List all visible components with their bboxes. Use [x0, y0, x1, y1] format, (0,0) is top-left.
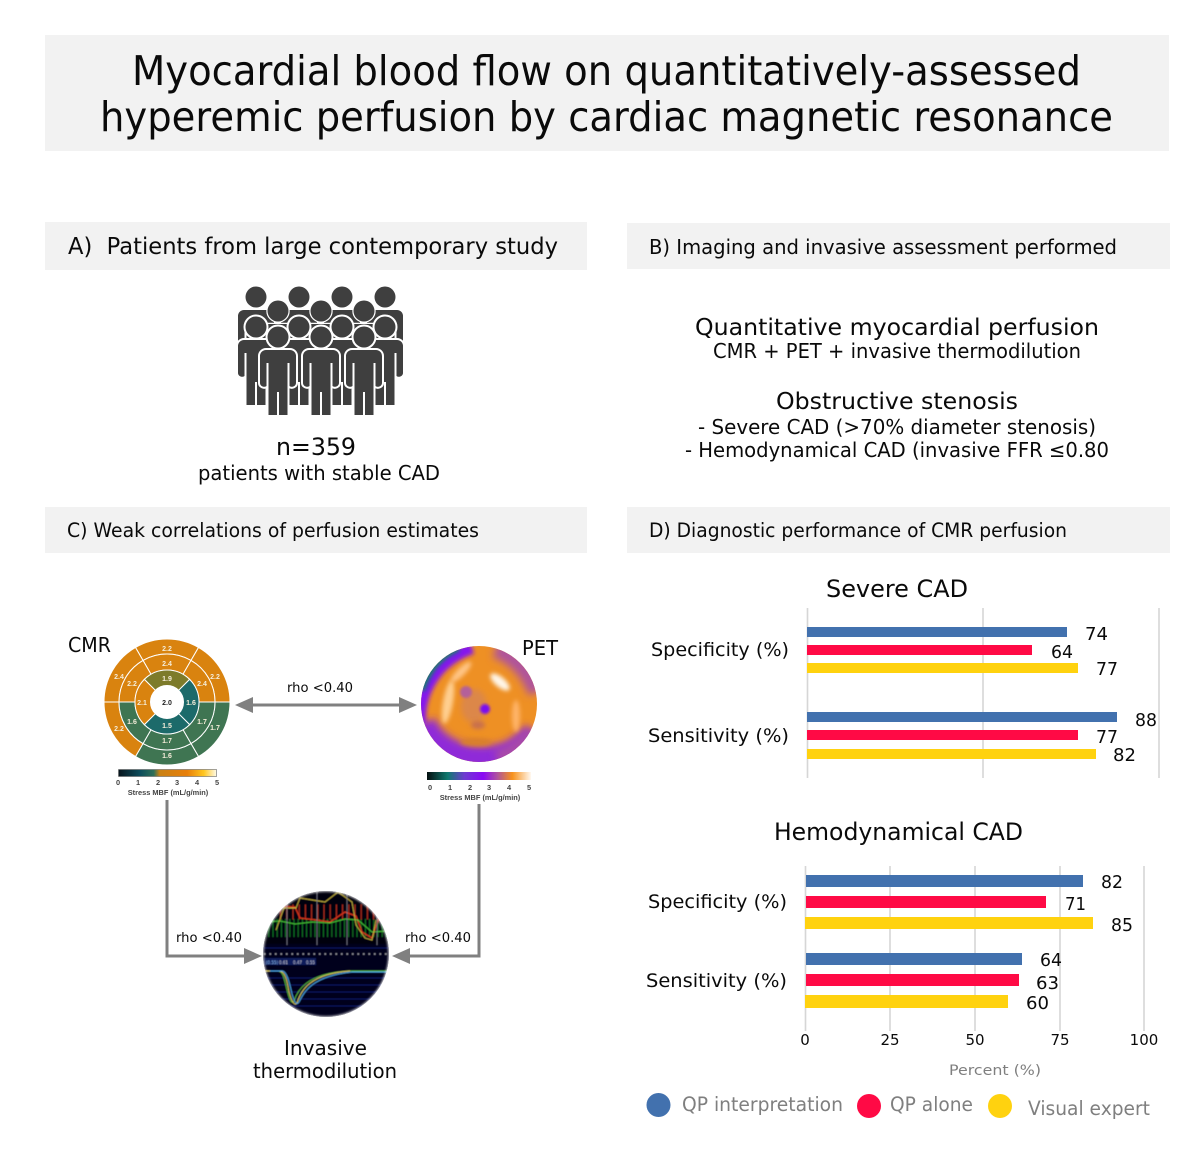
x axis labels: 50: [965, 1031, 985, 1049]
label: CMR PET correlation: rho <0.40: [287, 680, 353, 696]
patient description: patients with stable CAD: [198, 461, 440, 485]
x axis labels: [800, 1031, 1158, 1049]
chart: CMR bullseye: 2.2: [210, 674, 220, 681]
x axis labels: 0: [800, 1031, 810, 1049]
title banner: Myocardial blood flow on quantitatively-assessed: [132, 47, 1081, 95]
chart: CMR bullseye: 2.1: [137, 700, 147, 707]
caption: invasive thermodilution: thermodilution: [253, 1059, 397, 1083]
chart: hemodynamical CAD: 71: [1065, 894, 1086, 915]
image: invasive thermodilution trace: (0.55): [266, 960, 278, 965]
legend: CMR colour bar: 4: [195, 778, 200, 787]
chart: CMR bullseye: 1.6: [186, 700, 196, 707]
heading D: D) Diagnostic performance of CMR perfusion: [649, 519, 1067, 542]
arrow: PET to thermodilution: [392, 804, 479, 964]
text: quantitative perfusion: Quantitative myocardial perfusion: [695, 313, 1099, 341]
chart: CMR bullseye: 1.7: [162, 738, 172, 745]
legend: CMR colour bar: Stress MBF (mL/g/min): [128, 788, 209, 797]
chart: CMR bullseye: 2.2: [114, 726, 124, 733]
chart: hemodynamical CAD: 64: [1040, 950, 1062, 971]
legend: Visual expert: [988, 1094, 1150, 1120]
chart: CMR bullseye: 1.7: [210, 725, 220, 732]
heading A: A) Patients from large contemporary study: [68, 234, 558, 260]
chart: severe CAD: 64: [1051, 642, 1073, 663]
arrow: CMR to PET: [235, 697, 417, 713]
legend: QP interpretation: QP interpretation: [682, 1093, 843, 1116]
legend: PET colour bar: 1: [448, 783, 452, 792]
chart: severe CAD: 77: [1096, 659, 1118, 680]
x axis labels: 75: [1050, 1031, 1070, 1049]
legend: QP alone: QP alone: [890, 1093, 973, 1116]
chart: CMR bullseye: 1.9: [162, 676, 172, 683]
x axis title: Percent (%): [949, 1063, 1041, 1079]
PET label: PET: [522, 636, 559, 660]
chart: hemodynamical CAD: 82: [1101, 872, 1123, 893]
legend: PET colour bar: Stress MBF (mL/g/min): [440, 793, 521, 802]
chart: hemodynamical CAD: Specificity (%): [648, 891, 787, 913]
arrow: CMR to thermodilution: [167, 800, 262, 964]
heading B: [627, 223, 1170, 269]
panel C: correlations: [45, 507, 587, 1083]
image: invasive thermodilution trace: 0.47: [293, 960, 302, 965]
legend: CMR colour bar: 1: [136, 778, 140, 787]
x axis labels: 100: [1130, 1031, 1158, 1049]
legend: QP alone: [857, 1093, 973, 1118]
caption: invasive thermodilution: Invasive: [284, 1036, 367, 1060]
image: invasive thermodilution trace: 0.55: [306, 960, 315, 965]
text: quantitative perfusion: CMR + PET + invasive thermodilution: [713, 339, 1081, 363]
heading C: C) Weak correlations of perfusion estimates: [67, 519, 479, 542]
chart: severe CAD: Severe CAD: [826, 575, 968, 603]
panel B: assessment: [627, 223, 1170, 462]
panel A: patients: [45, 222, 587, 485]
title banner: [45, 35, 1169, 151]
chart: severe CAD: 82: [1113, 745, 1136, 766]
legend: CMR colour bar: 3: [175, 778, 179, 787]
chart: severe CAD: Sensitivity (%): [648, 725, 789, 747]
heading A: [45, 222, 587, 270]
image: invasive thermodilution trace: [260, 888, 392, 1020]
chart: CMR bullseye: 2.0: [162, 700, 172, 707]
legend: CMR colour bar: [116, 770, 219, 797]
chart: CMR bullseye: 1.6: [127, 719, 137, 726]
legend: CMR colour bar: 2: [156, 778, 160, 787]
image: invasive thermodilution trace: 0.61: [279, 960, 288, 965]
chart: PET polar map: [420, 645, 538, 763]
chart: CMR bullseye: 1.5: [162, 723, 172, 730]
label: CMR thermodilution correlation: rho <0.40: [176, 930, 242, 946]
icon: crowd of patients: [238, 286, 403, 415]
legend: PET colour bar: 0: [428, 783, 432, 792]
legend: PET colour bar: 3: [487, 783, 491, 792]
heading C: [45, 507, 587, 553]
legend: PET colour bar: 5: [527, 783, 531, 792]
text: obstructive stenosis: - Severe CAD (>70% diameter stenosis): [698, 415, 1096, 439]
chart: severe CAD: 88: [1135, 710, 1157, 731]
legend: CMR colour bar: 0: [116, 778, 120, 787]
chart: CMR bullseye: 2.2: [127, 681, 137, 688]
text: quantitative perfusion: [695, 313, 1099, 363]
text: obstructive stenosis: - Hemodynamical CAD (invasive FFR ≤0.80: [685, 438, 1109, 462]
chart: hemodynamical CAD: Hemodynamical CAD: [774, 818, 1023, 846]
text: obstructive stenosis: Obstructive stenosis: [776, 387, 1018, 415]
heading D: [627, 507, 1170, 553]
legend: CMR colour bar: 5: [215, 778, 219, 787]
title banner: hyperemic perfusion by cardiac magnetic resonance: [100, 93, 1113, 141]
chart: CMR bullseye: 2.4: [114, 674, 124, 681]
CMR label: CMR: [68, 633, 111, 657]
chart: severe CAD: 77: [1096, 727, 1118, 748]
caption: invasive thermodilution: [253, 1036, 397, 1083]
chart: severe CAD: 74: [1085, 624, 1108, 645]
chart: hemodynamical CAD: 60: [1026, 993, 1049, 1014]
chart: severe CAD: [648, 575, 1159, 778]
legend: PET colour bar: [427, 772, 531, 802]
patient count: n=359: [276, 433, 356, 461]
chart: hemodynamical CAD: 63: [1036, 973, 1059, 994]
panel D: diagnostic performance: [627, 507, 1170, 1120]
chart: CMR bullseye: 2.4: [162, 661, 172, 668]
heading B: B) Imaging and invasive assessment performed: [649, 235, 1117, 259]
chart: CMR bullseye: 1.7: [197, 719, 207, 726]
chart: hemodynamical CAD: Sensitivity (%): [646, 970, 787, 992]
legend: PET colour bar: 4: [507, 783, 512, 792]
x axis labels: 25: [880, 1031, 900, 1049]
chart: CMR bullseye: [104, 638, 230, 766]
legend: PET colour bar: 2: [468, 783, 472, 792]
chart: CMR bullseye: 2.4: [197, 681, 207, 688]
label: PET thermodilution correlation: rho <0.40: [405, 930, 471, 946]
legend: Visual expert: Visual expert: [1028, 1097, 1150, 1120]
chart: CMR bullseye: 1.6: [162, 753, 172, 760]
chart: CMR bullseye: 2.2: [162, 646, 172, 653]
chart: severe CAD: Specificity (%): [651, 639, 789, 661]
text: obstructive stenosis: [685, 387, 1109, 462]
chart: hemodynamical CAD: [646, 818, 1158, 1079]
chart: hemodynamical CAD: 85: [1111, 915, 1133, 936]
